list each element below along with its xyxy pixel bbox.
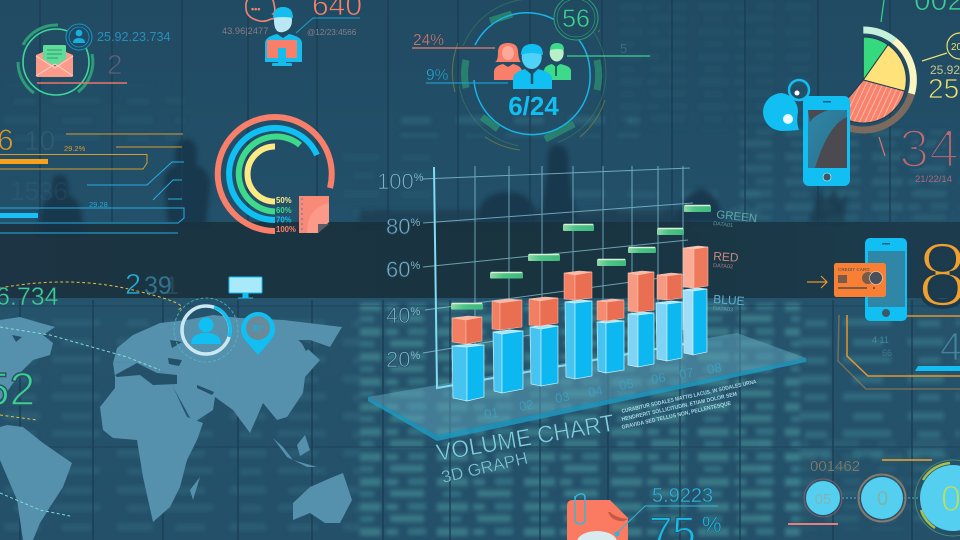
chart title: VOLUME CHART [434, 410, 617, 467]
icon: green person [544, 43, 571, 80]
icon: salmon person [494, 43, 522, 80]
chart: pie widget [836, 0, 960, 185]
icon: location pin: 30° [252, 323, 265, 333]
chart: volume 3D bar chart [368, 166, 806, 487]
icon: envelope [36, 45, 73, 77]
y axis labels: % [410, 306, 420, 318]
pie segments [863, 37, 888, 80]
x axis labels: 06 [650, 370, 667, 387]
x axis labels: 01 [483, 405, 500, 422]
green share [567, 41, 650, 56]
map seas [12, 335, 314, 395]
donut legend: 50% [276, 196, 292, 205]
Madagascar [190, 477, 200, 500]
blue bar group [0, 162, 184, 233]
ghost numbers [0, 124, 68, 206]
blue bars [452, 288, 707, 401]
chart: radial progress donut [218, 117, 332, 234]
email ring [18, 25, 93, 95]
chart description [621, 379, 757, 431]
x axis labels: 07 [678, 365, 695, 382]
frame contents: 4 11 [872, 335, 889, 345]
blue share [426, 67, 508, 84]
legend: red: RED [713, 249, 739, 265]
counter 56: 56 [562, 5, 590, 33]
Africa [100, 362, 203, 522]
legend: blue: DATA03 [713, 306, 733, 313]
dial medium [858, 474, 906, 522]
icon: location pin [241, 312, 275, 355]
y axis labels: 20 [386, 347, 410, 372]
arrow to card [807, 276, 827, 288]
pie outer ring [846, 30, 913, 130]
blue share: 9% [426, 67, 449, 84]
pie lower annotation [879, 119, 959, 185]
icon: agent at monitor [265, 7, 302, 66]
panel: email widget [18, 24, 171, 95]
map value blue: 39 [144, 272, 172, 300]
orange bar group: 29.2% [64, 144, 86, 153]
email value: 25.92.23.734 [97, 30, 171, 44]
Australia [293, 473, 352, 523]
donut legend: 60% [276, 206, 292, 215]
agent left value: 43.96|2477 [222, 26, 268, 36]
stat value: 5.9223 [652, 485, 713, 507]
chart platform [368, 333, 806, 441]
counter 56 [554, 0, 598, 40]
salmon share [412, 32, 495, 49]
green share: 5 [620, 41, 627, 56]
agent right value: @12/23:4566 [307, 28, 357, 37]
icon: user ring [174, 298, 238, 362]
ghost numbers: 10 [24, 125, 55, 156]
chart description: CURABITUR SODALES MATTIS LACUS, IN SODALES URNA [621, 379, 757, 415]
email counter: 2 [107, 49, 123, 80]
x axis labels: 02 [518, 397, 535, 414]
legend: green: GREEN [716, 209, 758, 225]
icon: credit card: CREDIT CARD [838, 267, 870, 272]
email underline [37, 82, 127, 84]
legend: red: DATA02 [713, 263, 733, 270]
chart grid [422, 166, 693, 372]
donut legend: 70% [276, 216, 292, 224]
icon: blue person [513, 44, 552, 89]
x axis labels: 05 [618, 376, 635, 393]
panel: map overlays [0, 269, 275, 516]
route lines [0, 282, 181, 516]
pie annotation: 25.92 [930, 63, 960, 77]
panel: credit card payment [807, 224, 960, 389]
team ratio: 6/24 [508, 91, 559, 121]
frame contents [872, 325, 960, 371]
map value blue: 1 [165, 272, 179, 300]
North America [0, 317, 55, 400]
icon: phone with card [865, 238, 907, 321]
panel: attachment stat [567, 485, 722, 540]
y axis labels: 100 [377, 169, 414, 194]
x axis labels [483, 360, 723, 422]
dial large [915, 460, 960, 536]
green data markers [451, 205, 711, 310]
map value blue: 2 [125, 269, 141, 301]
x axis labels: 04 [587, 383, 604, 400]
donut legend [276, 196, 296, 234]
y axis labels: % [414, 172, 424, 184]
blue bar group: 29.28 [89, 200, 108, 209]
y axis labels: % [410, 217, 420, 229]
ghost digit: 1 [210, 369, 223, 396]
y axis labels: 80 [386, 214, 410, 239]
y axis labels [377, 169, 424, 372]
donut legend: 100% [276, 225, 296, 234]
stat percent: % [702, 512, 722, 537]
x axis labels: 08 [706, 360, 723, 377]
dial accent line [882, 459, 932, 461]
Eurasia [113, 315, 342, 433]
dial small: 05 [815, 491, 831, 508]
chart description: GRAVIDA SED TELLUS NON, PELLENTESQUE [621, 401, 732, 431]
orange bar group [0, 134, 183, 169]
legend: green: DATA01 [713, 221, 733, 229]
pie lower annotation: 21/22/14 [915, 174, 952, 185]
y axis labels: % [410, 260, 420, 272]
pie lower annotation: 34 [899, 119, 959, 179]
dial counter: 001462 [810, 458, 860, 475]
icon: chat bubble: ••• [251, 4, 260, 14]
orange frame [838, 315, 960, 389]
y axis labels: % [410, 350, 420, 362]
panel: support agent [222, 0, 362, 66]
agent connector [296, 18, 360, 33]
dial underline [788, 523, 838, 525]
Southeast Asia [273, 435, 317, 467]
icon: phone [803, 96, 850, 186]
panel: smartphone with bubbles [763, 80, 850, 186]
salmon share: 24% [413, 32, 444, 49]
icon: location bubbles [763, 80, 809, 131]
map value blue [125, 269, 179, 301]
map: world [0, 315, 352, 540]
icon: monitor [229, 277, 262, 298]
dial medium: 0 [877, 488, 888, 510]
chart subtitle: 3D GRAPH [440, 449, 530, 487]
x axis labels: 03 [554, 389, 571, 406]
pie annotation [922, 33, 960, 104]
icon: user badge [66, 24, 92, 50]
stat connector [614, 506, 718, 536]
icon: notebook [299, 196, 329, 233]
panel: bottom right dials [788, 458, 960, 536]
dial connectors [842, 497, 920, 499]
panel: left progress bars [0, 124, 184, 233]
icon: credit card [834, 263, 886, 297]
y axis labels: 60 [386, 257, 410, 282]
icon: document with clip [567, 494, 628, 540]
chart axis [434, 167, 690, 388]
panel: team counter [412, 0, 650, 150]
ghost numbers: 1536 [10, 176, 68, 206]
stat percent [649, 508, 722, 540]
chart description: HENDRERIT SOLLICITUDIN. ETIAM DOLOR SEM [621, 391, 738, 423]
South America [0, 425, 72, 540]
frame contents: 66 [882, 348, 892, 358]
legend: blue: BLUE [713, 292, 745, 308]
dial small [804, 479, 842, 517]
icon: chat bubble [246, 0, 283, 21]
red bars [452, 246, 708, 344]
y axis labels: 40 [386, 303, 410, 328]
team rings [452, 0, 606, 150]
pie connector top [881, 0, 884, 22]
